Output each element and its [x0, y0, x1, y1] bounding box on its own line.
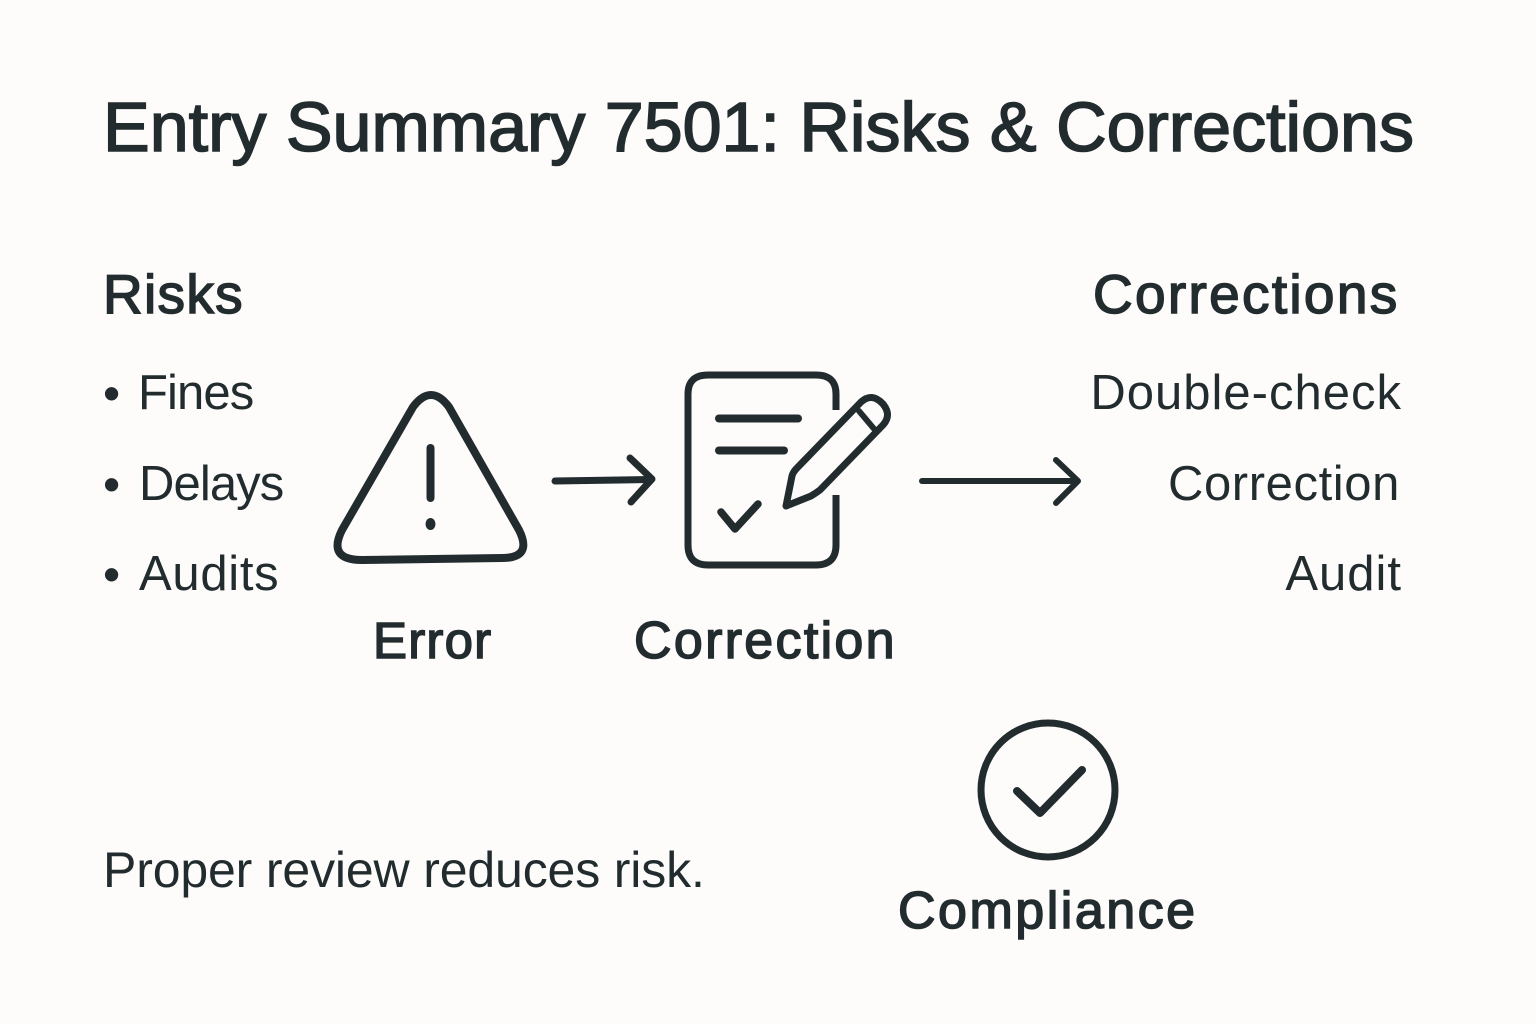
heading: corrections: Corrections — [1093, 263, 1400, 325]
list: risks: Fines — [138, 366, 253, 420]
list: corrections: Double-check — [1090, 366, 1402, 420]
list: risks: • — [103, 458, 120, 512]
list: corrections: Correction — [1168, 457, 1400, 511]
list: risks: • — [103, 548, 120, 602]
heading: risks: Risks — [103, 263, 244, 325]
list: corrections — [1090, 366, 1402, 601]
label: correction: Correction — [634, 612, 897, 670]
list: risks — [103, 366, 283, 602]
title: Entry Summary 7501: Risks & Corrections — [103, 88, 1414, 166]
label: compliance: Compliance — [898, 882, 1198, 940]
label: error: Error — [373, 612, 492, 669]
list: risks: Delays — [139, 457, 283, 511]
footer note: Proper review reduces risk. — [103, 842, 705, 898]
list: risks: Audits — [139, 547, 279, 601]
list: risks: • — [103, 367, 120, 421]
list: corrections: Audit — [1285, 547, 1402, 601]
